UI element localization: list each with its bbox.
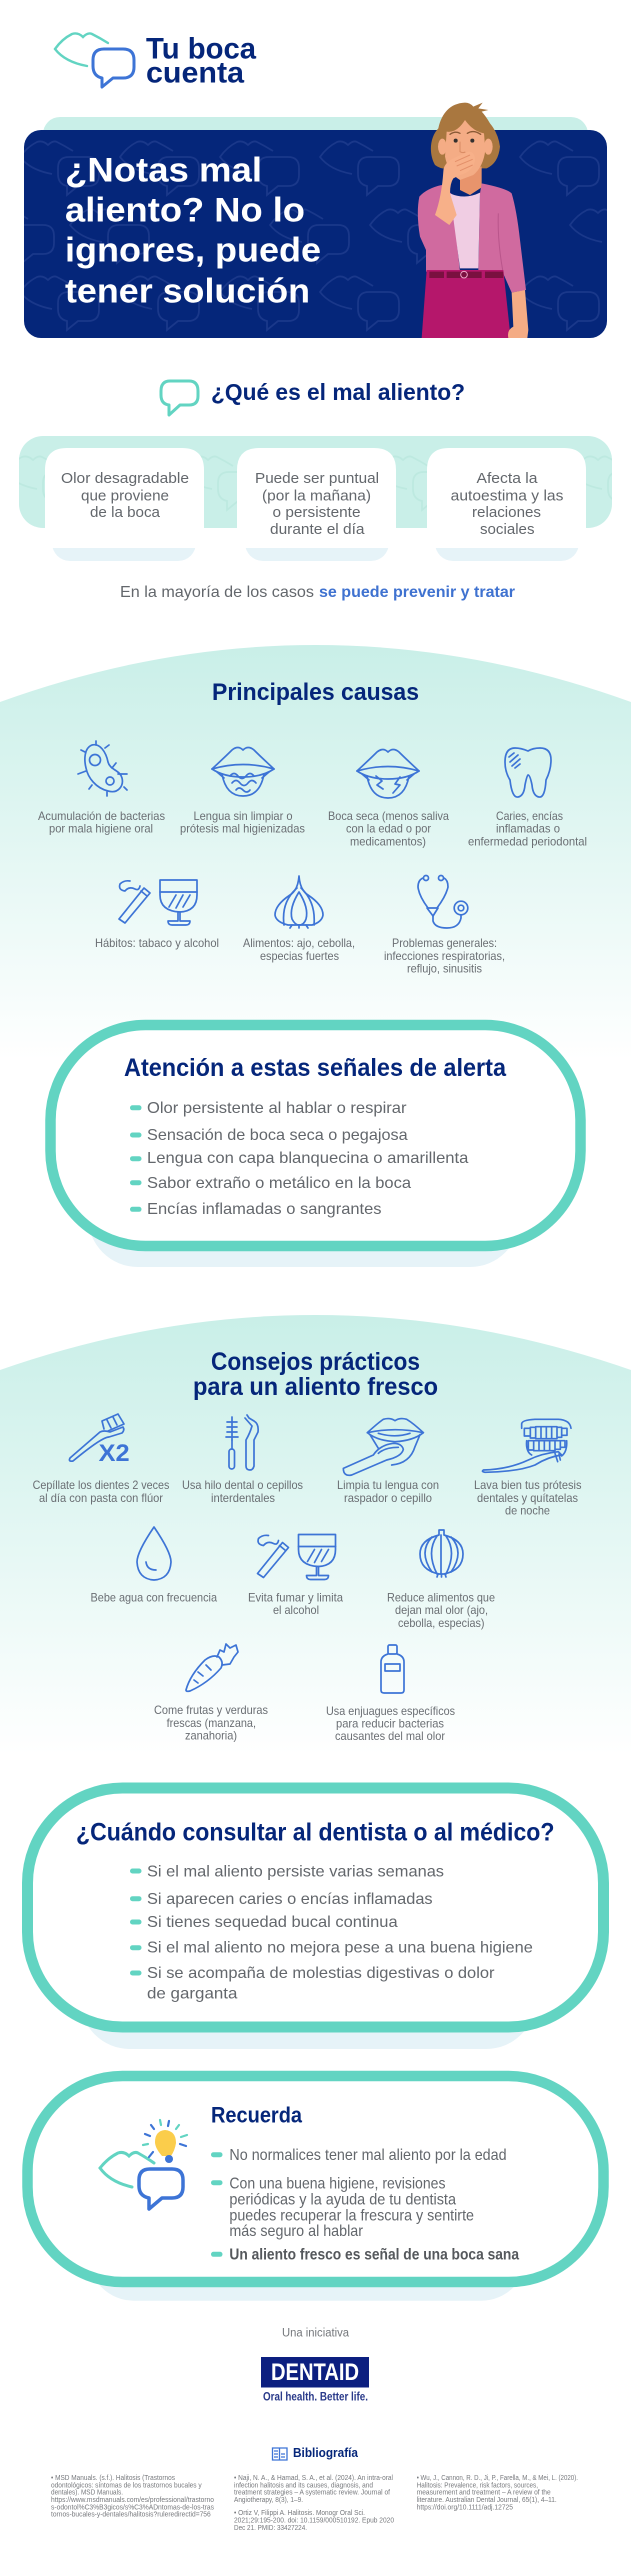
- list: cuándo consultar: [130, 1864, 533, 2003]
- list: señales: Olor persistente al hablar o respirar: [147, 1100, 407, 1117]
- icon: cigarette and wine glass: [258, 1534, 336, 1580]
- tip: prótesis: de noche: [505, 1504, 550, 1518]
- reference column 2: 2021;29:195-200. doi: 10.1159/000510192. Epub 2020: [234, 2518, 394, 2525]
- icon: dry tongue: [357, 750, 419, 798]
- hero title: aliento? No lo: [65, 192, 305, 230]
- cause: hábitos: Hábitos: tabaco y alcohol: [95, 936, 219, 950]
- list: señales: Sensación de boca seca o pegajosa: [147, 1127, 408, 1144]
- card: olor: de la boca: [90, 504, 161, 521]
- reference column 1: tornos-bucales-y-dentales/halitosis?ruleredirectid=756: [51, 2512, 211, 2519]
- cause: bacterias: Acumulación de bacterias: [38, 809, 165, 823]
- icon: carrot: [186, 1644, 238, 1691]
- background: causes arc: [0, 645, 631, 1060]
- tip: enjuagues: Usa enjuagues específicos: [326, 1704, 455, 1718]
- reference column 2: • Naji, N. A., & Hamad, S. A., et al. (2024). An intra-oral: [234, 2475, 393, 2482]
- reference column 3: Halitosis: Prevalence, risk factors, sources,: [417, 2482, 538, 2489]
- cause: caries: inflamadas o: [496, 822, 560, 836]
- tip: prótesis: [474, 1419, 582, 1518]
- tip: frutas y verduras: [154, 1644, 268, 1743]
- mint band: [19, 436, 612, 528]
- list: cuándo consultar: Si el mal aliento no mejora pese a una buena higiene: [147, 1940, 533, 1957]
- hero background pattern: [0, 141, 631, 330]
- panel: definition cards: [5, 436, 631, 561]
- tip: reducir alimentos: Reduce alimentos que: [387, 1591, 495, 1605]
- tip: limpiar lengua: [337, 1419, 439, 1505]
- reference column 3: • Wu, J., Cannon, R. D., Ji, P., Farella, M., & Mei, L. (2020).: [417, 2475, 578, 2482]
- list: recuerda: más seguro al hablar: [229, 2223, 364, 2240]
- logo wordmark: Tu boca: [146, 32, 256, 66]
- list: recuerda: puedes recuperar la frescura y sentirte: [229, 2207, 474, 2224]
- cause: lengua: prótesis mal higienizadas: [180, 822, 305, 836]
- card: puntual o persistente: [237, 448, 396, 561]
- tip: hilo dental: interdentales: [211, 1491, 275, 1505]
- panel: hero banner: [0, 103, 631, 338]
- cause: caries: enfermedad periodontal: [468, 834, 587, 848]
- cause: caries: Caries, encías: [496, 809, 563, 823]
- tip: hilo dental: [182, 1415, 303, 1505]
- tip: agua: Bebe agua con frecuencia: [90, 1591, 217, 1605]
- tip: frutas y verduras: frescas (manzana,: [167, 1716, 256, 1730]
- heading: Principales causas: [212, 679, 419, 706]
- card: puntual o persistente: Puede ser puntual: [255, 470, 379, 487]
- reference column 1: dentales). MSD Manuals.: [51, 2490, 123, 2497]
- pill outline: [28, 1788, 604, 2027]
- card: autoestima: sociales: [480, 521, 534, 538]
- pill shadow: [80, 1930, 536, 2049]
- pill outline: [50, 1025, 580, 1246]
- icon: coated tongue: [212, 748, 274, 796]
- icon: tongue scraper: [343, 1419, 423, 1475]
- heading: para un aliento fresco: [193, 1373, 438, 1401]
- cause: boca seca: [328, 750, 449, 848]
- cause: lengua: [180, 748, 305, 836]
- tip: prótesis: Lava bien tus prótesis: [474, 1478, 582, 1492]
- icon: water drop: [137, 1527, 171, 1580]
- heading: Bibliografía: [293, 2445, 359, 2460]
- mint backing: [43, 117, 588, 177]
- tip: cepillado: [33, 1414, 169, 1505]
- text: prevention note: se puede prevenir y tratar: [319, 584, 515, 601]
- list: recuerda: [211, 2147, 519, 2264]
- cause: boca seca: con la edad o por: [346, 822, 431, 836]
- icon: stethoscope: [418, 876, 468, 928]
- list: señales: Encías inflamadas o sangrantes: [147, 1201, 382, 1218]
- cause: caries: [468, 748, 587, 848]
- panel: recuerda: [28, 2076, 604, 2301]
- icon: tooth: [505, 748, 551, 797]
- list: cuándo consultar: Si el mal aliento persiste varias semanas: [147, 1864, 444, 1881]
- reference column 3: https://doi.org/10.1111/adj.12725: [417, 2504, 513, 2511]
- card: autoestima: autoestima y las: [451, 488, 563, 505]
- tip: evitar tabaco y alcohol: Evita fumar y limita: [248, 1591, 343, 1605]
- hero title: ¿Notas mal: [65, 152, 262, 190]
- heading: Qué es el mal aliento: [161, 379, 465, 415]
- heading: Recuerda: [211, 2103, 303, 2128]
- background: tips arc: [0, 1315, 631, 1755]
- tip: enjuagues: para reducir bacterias: [336, 1717, 444, 1731]
- icon: dentures with brush: [482, 1419, 571, 1472]
- tip: evitar tabaco y alcohol: [248, 1534, 343, 1617]
- tip: reducir alimentos: [387, 1530, 495, 1630]
- tip: reducir alimentos: dejan mal olor (ajo,: [395, 1603, 488, 1617]
- list: recuerda: Con una buena higiene, revisiones: [229, 2175, 446, 2192]
- section: consejos prácticos: [33, 1348, 582, 1743]
- logo wordmark: cuenta: [146, 57, 244, 90]
- icon: onion: [420, 1530, 463, 1577]
- illustration: woman covering her mouth: [418, 103, 528, 338]
- cause: lengua: Lengua sin limpiar o: [194, 809, 293, 823]
- list: cuándo consultar: Si aparecen caries o encías inflamadas: [147, 1891, 433, 1908]
- heading: ¿Cuándo consultar al dentista o al médico?: [76, 1819, 554, 1847]
- card: olor: que proviene: [81, 488, 169, 505]
- text: prevention note: En la mayoría de los casos: [120, 584, 314, 601]
- cause: problemas generales: reflujo, sinusitis: [407, 962, 482, 976]
- cause: bacterias: [38, 741, 165, 836]
- list: cuándo consultar: Si se acompaña de molestias digestivas o dolor: [147, 1965, 495, 1982]
- cause: problemas generales: Problemas generales:: [392, 936, 497, 950]
- icon: mouthwash bottle: [381, 1645, 404, 1693]
- pill shadow: [88, 2200, 527, 2301]
- list: señales: [130, 1100, 469, 1218]
- heading: [193, 1348, 438, 1401]
- tip: frutas y verduras: zanahoria): [185, 1729, 237, 1743]
- heading: Atención a estas señales de alerta: [124, 1054, 507, 1082]
- list: recuerda: No normalices tener mal aliento por la edad: [229, 2147, 507, 2164]
- cause: problemas generales: infecciones respiratorias,: [384, 949, 505, 963]
- card: autoestima: relaciones: [472, 504, 541, 521]
- list: señales: Sabor extraño o metálico en la boca: [147, 1175, 411, 1192]
- logo: Dentaid: DENTAID: [271, 2359, 359, 2386]
- cause: alimentos: [243, 876, 355, 963]
- list: cuándo consultar: Si tienes sequedad bucal continua: [147, 1914, 398, 1931]
- cause: hábitos: [95, 880, 219, 950]
- panel: cuándo consultar: [28, 1788, 604, 2049]
- heading: Consejos prácticos: [211, 1348, 420, 1376]
- heading text: ¿Qué es el mal aliento?: [211, 379, 465, 405]
- icon: cigarette and wine glass: [119, 880, 197, 925]
- list: cuándo consultar: de garganta: [147, 1986, 238, 2003]
- reference column 3: [417, 2475, 578, 2511]
- reference column 1: https://www.msdmanuals.com/es/professional/trastorno: [51, 2497, 214, 2504]
- card: autoestima: Afecta la: [476, 470, 538, 487]
- tip: cepillado: Cepíllate los dientes 2 veces: [33, 1478, 169, 1492]
- reference column 3: literature. Australian Dental Journal, 65(1), 4–11.: [417, 2497, 557, 2504]
- list: recuerda: periódicas y la ayuda de tu dentista: [229, 2191, 456, 2208]
- reference column 1: • MSD Manuals. (s.f.). Halitosis (Trastornos: [51, 2475, 175, 2482]
- tip: limpiar lengua: Limpia tu lengua con: [337, 1478, 439, 1492]
- cause: alimentos: especias fuertes: [260, 949, 339, 963]
- band pattern: [5, 456, 631, 510]
- reference column 1: [51, 2475, 214, 2519]
- tip: cepillado: al día con pasta con flúor: [39, 1491, 163, 1505]
- tip: agua: [90, 1527, 217, 1605]
- logo: Dentaid: [261, 2357, 369, 2404]
- tip: prótesis: dentales y quítatelas: [477, 1491, 578, 1505]
- icon: interdental brushes: [226, 1415, 258, 1470]
- reference column 2: treatment strategies – A systematic review. Journal of: [234, 2490, 390, 2497]
- cause: boca seca: Boca seca (menos saliva: [328, 809, 449, 823]
- text: una iniciativa: Una iniciativa: [282, 2328, 350, 2340]
- logo: Tu boca cuenta: [55, 32, 256, 90]
- hero title: [65, 152, 321, 311]
- text: prevention note: [120, 584, 515, 601]
- panel: señales de alerta: [50, 1025, 580, 1267]
- pill outline: [28, 2076, 604, 2282]
- pill shadow: [88, 1150, 520, 1267]
- reference column 1: s-odontol%C3%B3gicos/s%C3%ADntomas-de-los-tras: [51, 2504, 214, 2511]
- reference column 2: • Ortiz V, Filippi A. Halitosis. Monogr Oral Sci.: [234, 2510, 365, 2517]
- tip: reducir alimentos: cebolla, especias): [398, 1616, 484, 1630]
- tip: frutas y verduras: Come frutas y verduras: [154, 1703, 268, 1717]
- section: principales causas: [38, 679, 587, 976]
- reference column 2: [234, 2475, 394, 2532]
- icon: speech bubble: [161, 381, 198, 415]
- card: olor: [45, 448, 204, 561]
- navy banner: [24, 130, 607, 338]
- card: puntual o persistente: o persistente: [272, 504, 360, 521]
- reference column 1: odontológicos: síntomas de los trastornos bucales y: [51, 2482, 202, 2489]
- tip: enjuagues: [326, 1645, 455, 1743]
- card: olor: Olor desagradable: [61, 470, 189, 487]
- card: puntual o persistente: durante el día: [270, 521, 365, 538]
- cause: bacterias: por mala higiene oral: [49, 822, 153, 836]
- icon: open book: [272, 2448, 287, 2460]
- card: autoestima: [427, 448, 586, 561]
- icon: bacteria: [78, 741, 127, 796]
- section: bibliografía: [51, 2445, 578, 2532]
- list: recuerda: Un aliento fresco es señal de una boca sana: [229, 2247, 519, 2264]
- reference column 3: measurement and treatment – A review of the: [417, 2490, 551, 2497]
- icon: lips, speech bubble and light bulb: [100, 2120, 187, 2209]
- tip: enjuagues: causantes del mal olor: [335, 1729, 445, 1743]
- icon: garlic: [275, 876, 323, 928]
- tip: hilo dental: Usa hilo dental o cepillos: [182, 1478, 303, 1492]
- logo wordmark: [146, 32, 256, 90]
- hero title: tener solución: [65, 273, 310, 311]
- icon: toothbrush x2: X2: [99, 1440, 130, 1467]
- icon: lips and speech bubble: [55, 33, 134, 87]
- reference column 2: infection halitosis and its causes, diagnosis, and: [234, 2482, 373, 2489]
- cause: alimentos: Alimentos: ajo, cebolla,: [243, 936, 355, 950]
- cause: problemas generales: [384, 876, 505, 976]
- tip: evitar tabaco y alcohol: el alcohol: [273, 1603, 319, 1617]
- list: señales: Lengua con capa blanquecina o amarillenta: [147, 1150, 469, 1167]
- card: puntual o persistente: (por la mañana): [262, 488, 371, 505]
- logo: Dentaid: Oral health. Better life.: [263, 2390, 368, 2404]
- hero title: ignores, puede: [65, 232, 321, 270]
- reference column 2: Angiotherapy, 8(3), 1–9.: [234, 2497, 303, 2504]
- tip: limpiar lengua: raspador o cepillo: [344, 1491, 432, 1505]
- reference column 2: Dec 21. PMID: 33427224.: [234, 2525, 307, 2532]
- cause: boca seca: medicamentos): [350, 834, 426, 848]
